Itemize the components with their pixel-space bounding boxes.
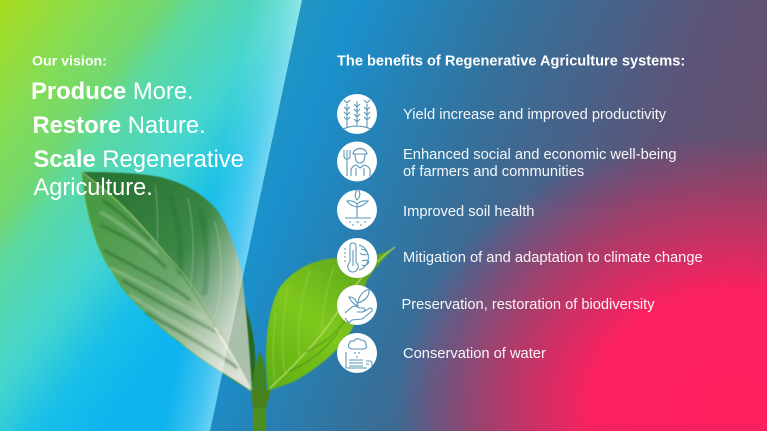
vision line 1: Produce More. <box>31 78 194 105</box>
vision line 3: Scale Regenerative <box>34 146 244 173</box>
right leaf <box>266 247 395 391</box>
benefit 6: water <box>337 333 546 373</box>
label: Mitigation of and adaptation to climate change <box>403 250 703 266</box>
vision line 3 <box>34 146 244 201</box>
benefit 4: climate <box>337 238 703 278</box>
benefit 3: soil <box>337 189 534 230</box>
icon: farmer <box>337 142 377 182</box>
vision line 2: Restore Nature. <box>32 112 206 139</box>
icon: wheat <box>337 94 377 134</box>
label: Improved soil health <box>403 204 534 220</box>
label: Preservation, restoration of biodiversity <box>402 297 655 313</box>
icon: soil sprout <box>337 189 377 230</box>
left gradient panel <box>0 0 302 431</box>
benefit 5: biodiversity <box>337 285 655 325</box>
icon: plant with two leaves <box>82 172 395 431</box>
label: of farmers and communities <box>403 164 584 180</box>
back dark leaf <box>222 293 255 390</box>
label <box>403 147 677 180</box>
big leaf veins <box>82 172 252 392</box>
stem joint <box>251 390 271 408</box>
vision line 3: Agriculture. <box>34 175 153 201</box>
icon: hand with plant <box>337 285 377 325</box>
right leaf veins <box>270 247 395 388</box>
label: Yield increase and improved productivity <box>403 107 667 123</box>
translucent light band on panel edge <box>148 0 302 431</box>
stem <box>253 400 266 431</box>
icon: rain cloud and water <box>337 333 377 373</box>
benefit 1: yield <box>337 94 667 134</box>
icon: thermometer and globe <box>337 238 377 278</box>
big leaf upper half <box>82 172 252 392</box>
big leaf lower half <box>82 172 252 392</box>
label: Conservation of water <box>403 346 546 362</box>
centre bud <box>252 352 266 403</box>
vision heading: Our vision: <box>32 54 107 70</box>
label: Enhanced social and economic well-being <box>403 147 677 163</box>
benefits heading: The benefits of Regenerative Agriculture systems: <box>337 54 685 70</box>
benefit 2: well-being <box>337 142 677 182</box>
